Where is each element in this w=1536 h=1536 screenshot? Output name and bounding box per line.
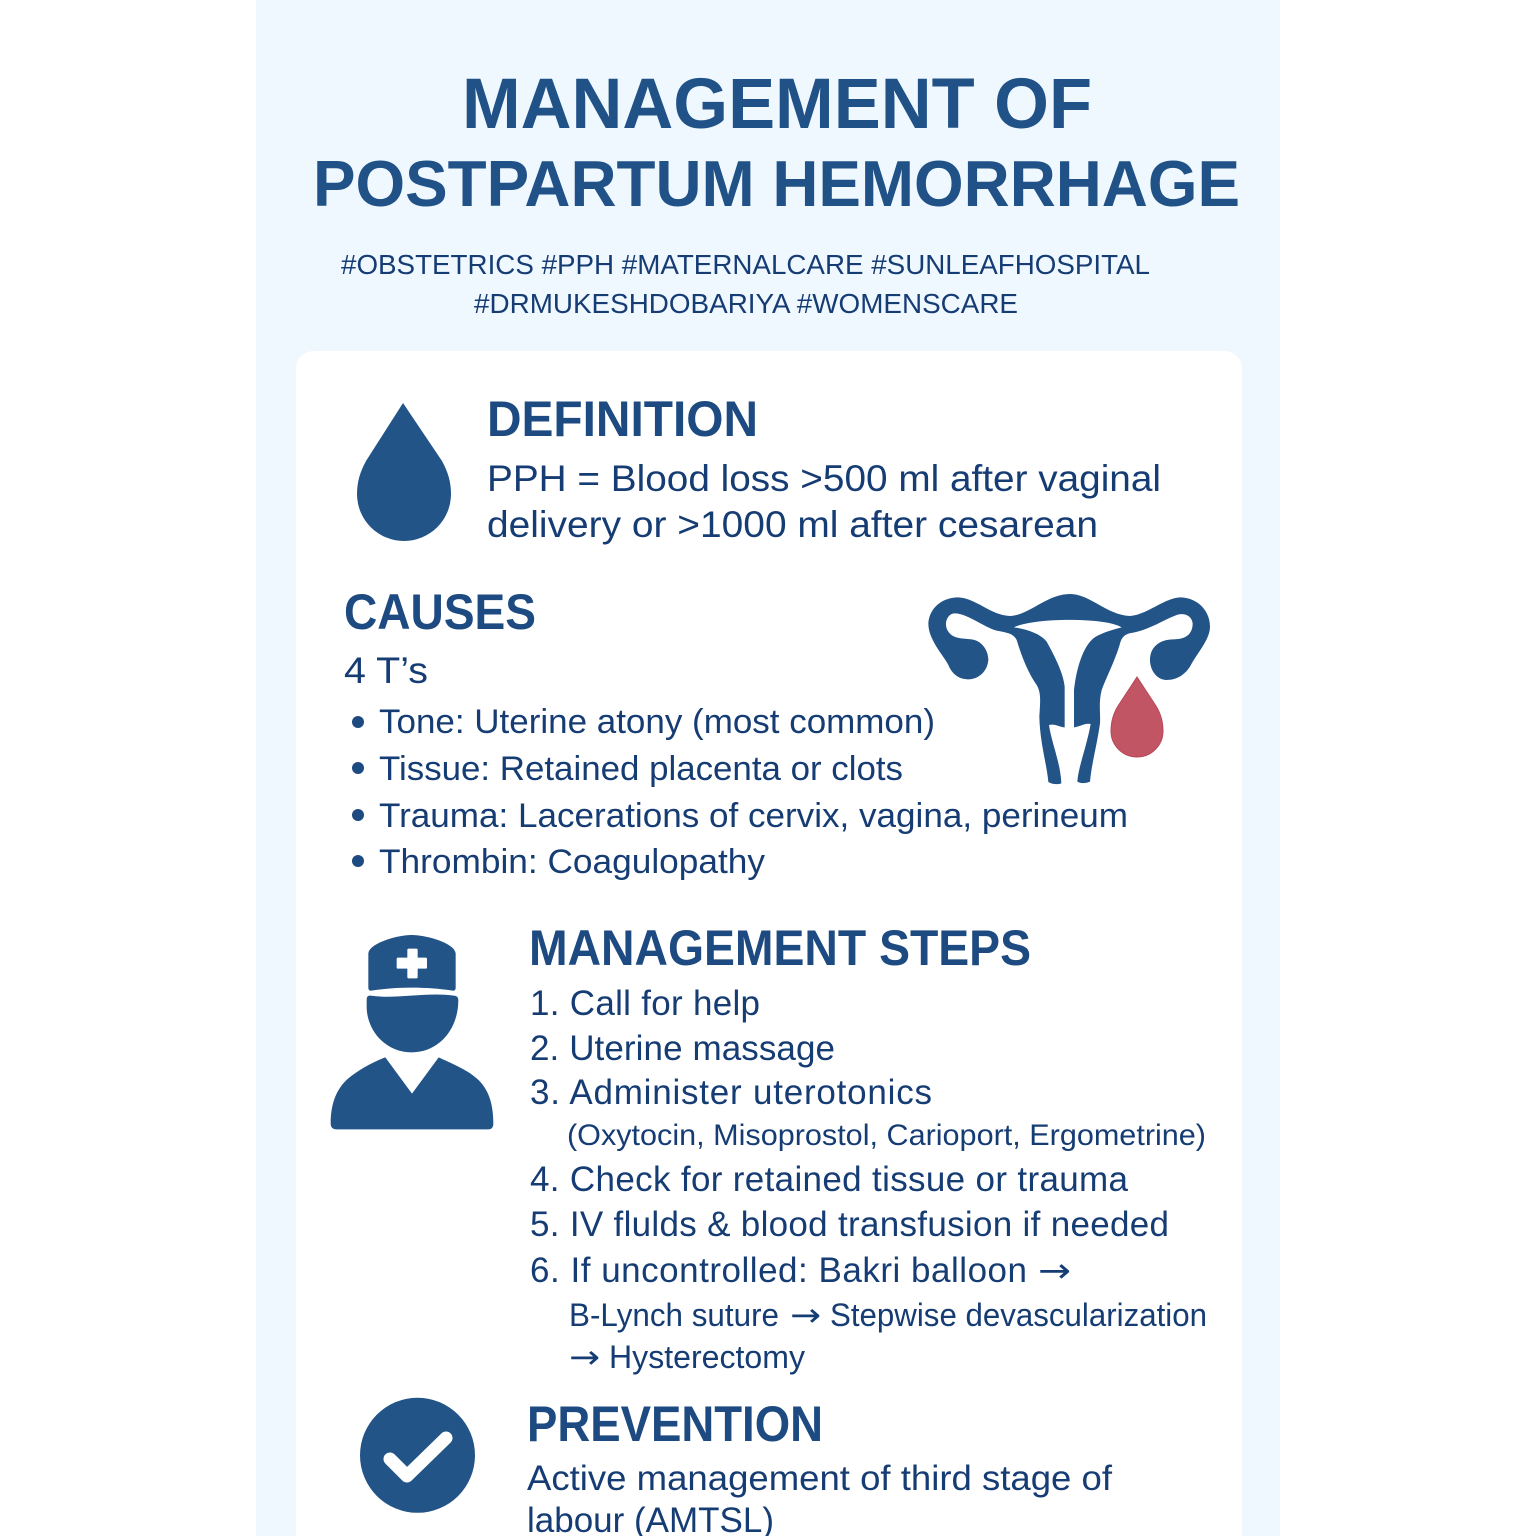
numbered steps: 5. IV flulds & blood transfusion if needed [530,1205,1169,1244]
hashtags: #DRMUKESHDOBARIYA #WOMENSCARE [474,288,1018,319]
numbered steps: 1. Call for help [530,984,760,1023]
subheading: 4 T's: 4 T’s [344,650,428,691]
prevention text: Active management of third stage of [527,1459,1112,1498]
causes bullet list: Tone: Uterine atony (most common) [379,703,935,741]
numbered steps: 3. Administer uterotonics [530,1073,932,1112]
numbered steps: Hysterectomy [609,1339,805,1375]
causes heading: CAUSES [344,584,536,640]
numbered steps: → [1038,1251,1071,1291]
icon: doctor with cap and mask [331,935,493,1129]
definition text [487,458,1161,545]
prevention heading: PREVENTION [527,1396,823,1452]
numbered steps: → [790,1296,821,1334]
numbered steps: 6. If uncontrolled: Bakri balloon [530,1251,1027,1290]
causes bullet list [352,703,1128,881]
causes bullet list: Thrombin: Coagulopathy [379,843,765,881]
numbered steps: B-Lynch suture [569,1297,779,1333]
icon: uterus with blood drop [928,594,1210,784]
icon: blood drop [357,403,451,541]
panel: prevention [360,1396,1112,1536]
hashtags [341,249,1150,319]
panel: definition [357,391,1161,545]
numbered steps: Stepwise devascularization [830,1297,1207,1333]
causes bullet list: Trauma: Lacerations of cervix, vagina, perineum [379,797,1128,835]
definition text: delivery or >1000 ml after cesarean [487,504,1098,545]
definition heading: DEFINITION [487,391,758,447]
definition text: PPH = Blood loss >500 ml after vaginal [487,458,1161,499]
numbered steps: 4. Check for retained tissue or trauma [530,1160,1129,1199]
icon: check mark circle [360,1398,475,1513]
numbered steps: → [569,1338,600,1376]
management steps heading: MANAGEMENT STEPS [529,920,1031,976]
numbered steps: (Oxytocin, Misoprostol, Carioport, Ergometrine) [567,1119,1206,1152]
hashtags: #OBSTETRICS #PPH #MATERNALCARE #SUNLEAFHOSPITAL [341,249,1150,280]
causes bullet list: Tissue: Retained placenta or clots [379,750,903,788]
numbered steps [530,984,1207,1376]
numbered steps: 2. Uterine massage [530,1029,835,1068]
panel: causes [344,584,1210,881]
panel: white content card [296,351,1242,1536]
prevention text [527,1459,1112,1536]
title: POSTPARTUM HEMORRHAGE [313,147,1240,220]
title [313,65,1240,220]
page background panel [256,0,1280,1536]
title: MANAGEMENT OF [462,65,1092,144]
panel: management steps [331,920,1207,1376]
